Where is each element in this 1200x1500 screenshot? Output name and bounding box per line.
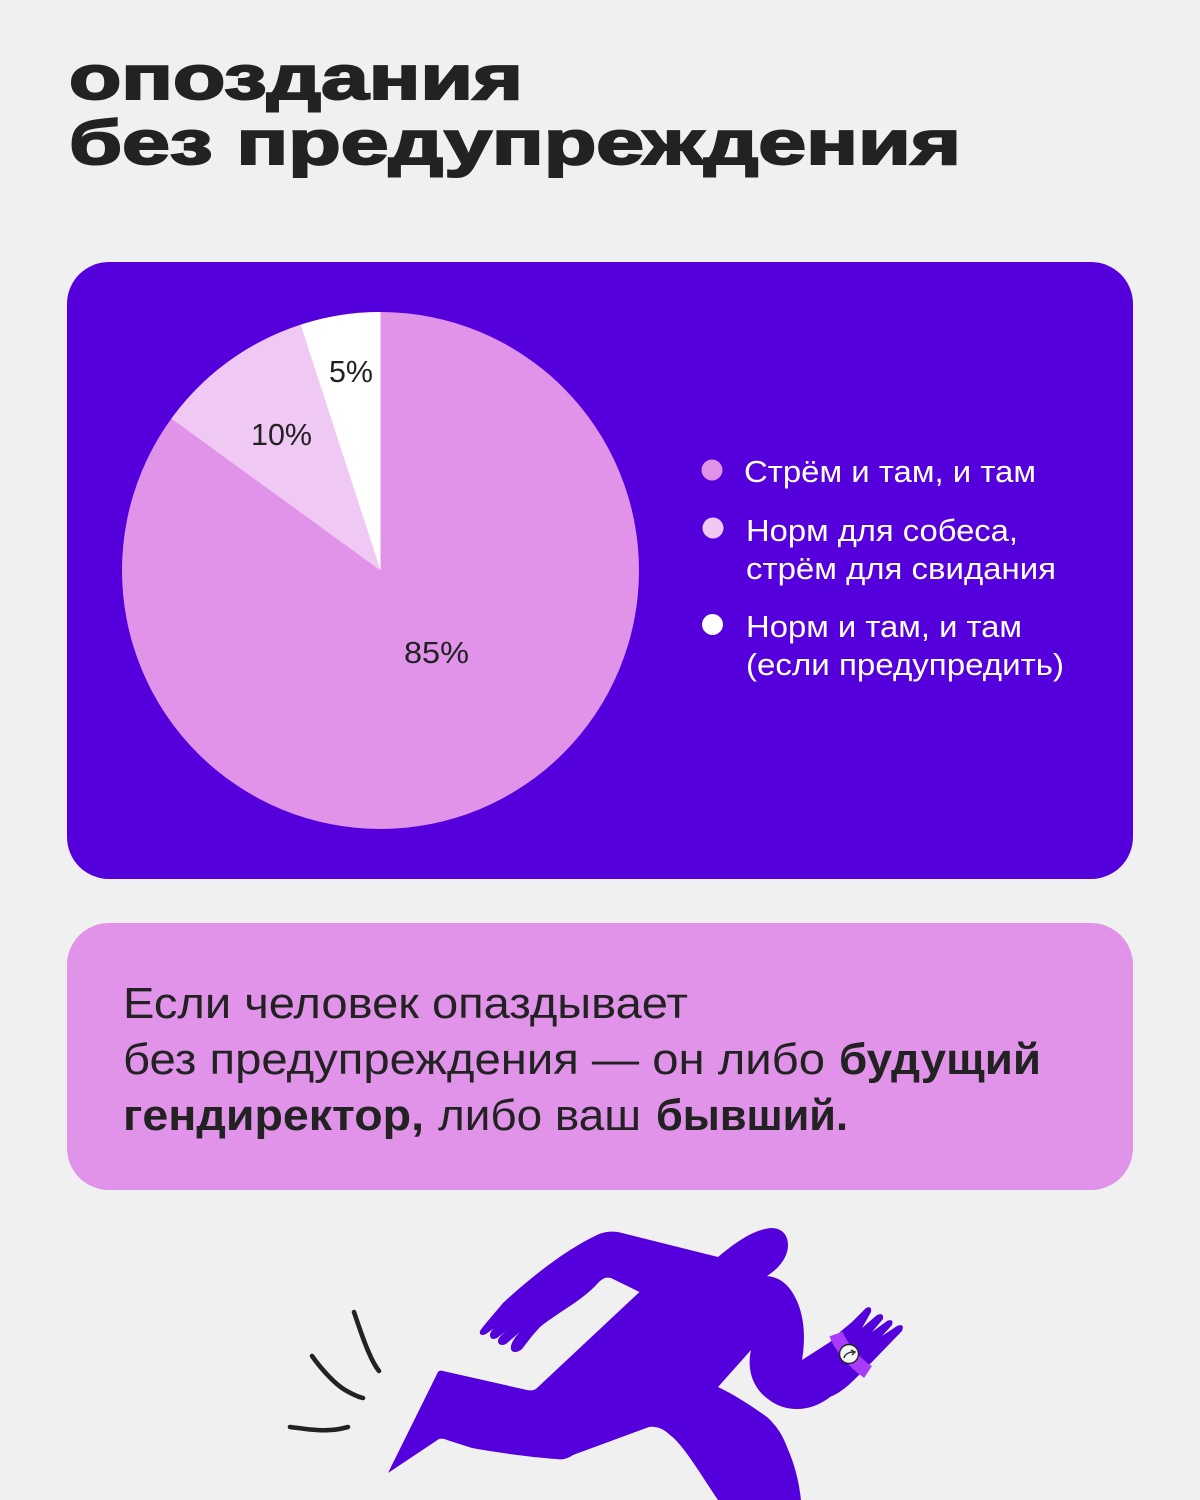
- label: 85%: 85%: [404, 635, 469, 670]
- watch strap: [836, 1334, 868, 1372]
- callout text: бывший.: [656, 1091, 848, 1140]
- callout text: будущий: [839, 1035, 1041, 1084]
- legend item: 5%: Норм и там, и там: [746, 609, 1022, 644]
- legend item: 85%: Стрём и там, и там: [744, 454, 1036, 489]
- title: без предупреждения: [69, 109, 961, 178]
- motion lines: [290, 1312, 379, 1430]
- pie chart: [122, 312, 639, 829]
- figure silhouette: [388, 1228, 903, 1500]
- callout text: без предупреждения — он либо: [123, 1035, 825, 1084]
- illustration: running person: [290, 1228, 903, 1500]
- title: опоздания: [69, 44, 523, 113]
- legend item: 5%: (если предупредить): [746, 647, 1064, 682]
- legend: [702, 454, 1064, 682]
- panel: pie chart and legend: [67, 262, 1133, 879]
- label: 10%: 10%: [251, 417, 312, 452]
- legend item: 10%: [702, 513, 1056, 586]
- legend item: 10%: Норм для собеса,: [746, 513, 1018, 548]
- callout text: [123, 979, 1041, 1140]
- legend item: 10%: стрём для свидания: [746, 551, 1056, 586]
- title: [69, 44, 961, 178]
- panel: callout: [67, 923, 1133, 1190]
- icon: watch face: [840, 1344, 858, 1364]
- label: 5%: 5%: [329, 354, 373, 389]
- callout text: Если человек опаздывает: [123, 979, 688, 1028]
- legend item: 5%: [702, 609, 1064, 682]
- callout text: гендиректор,: [123, 1091, 424, 1140]
- callout text: либо ваш: [438, 1091, 641, 1140]
